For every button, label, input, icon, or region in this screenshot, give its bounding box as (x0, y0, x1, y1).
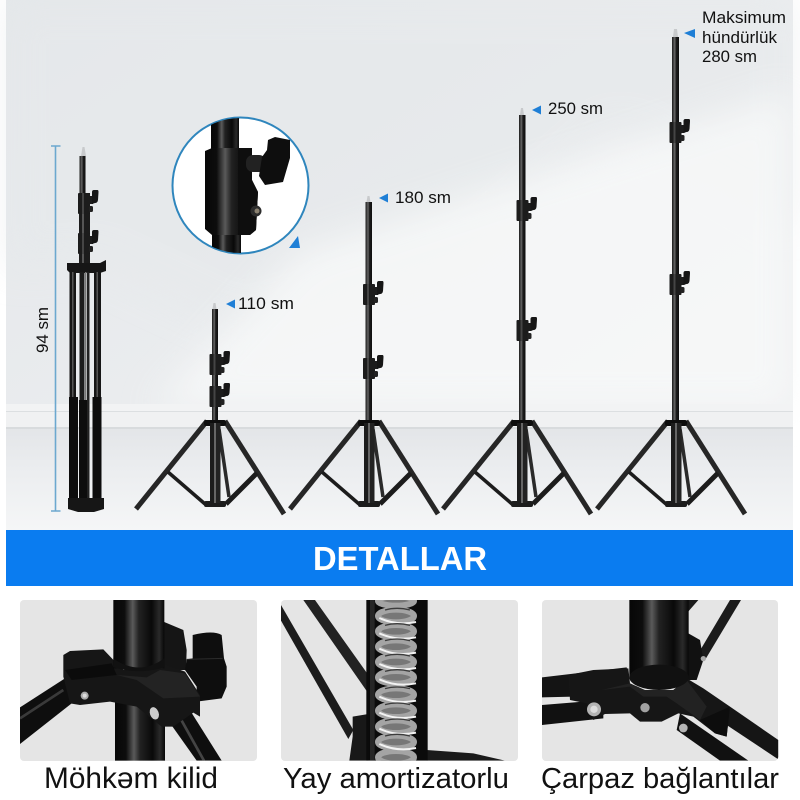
caption: Yay amortizatorlu: Yay amortizatorlu (283, 763, 509, 795)
caption: Möhkəm kilid: Möhkəm kilid (44, 762, 218, 795)
stand: 180 sm (290, 196, 438, 514)
panel: strong lock (20, 600, 257, 763)
label: maximum height 280 sm (684, 8, 786, 66)
panel: spring shock absorber (281, 596, 518, 764)
caption: Çarpaz bağlantılar: Çarpaz bağlantılar (541, 763, 779, 795)
dimension line: 94 sm: 94 sm (33, 307, 52, 353)
label: maximum height 280 sm: hündürlük (702, 28, 777, 47)
banner: DETALLAR (6, 530, 793, 586)
magnified clamp detail circle (172, 115, 308, 260)
label: 250 sm: 250 sm (548, 99, 603, 118)
stand: 250 sm (443, 108, 591, 514)
label: maximum height 280 sm: 280 sm (702, 47, 757, 66)
folded tripod stand (67, 147, 106, 512)
stand: 110 sm (136, 303, 284, 514)
label: maximum height 280 sm: Maksimum (702, 8, 786, 27)
panel: cross connections (542, 600, 778, 761)
label: 110 sm: 110 sm (238, 294, 294, 313)
photo background: wall and floor (6, 0, 793, 530)
dimension line: 94 sm (33, 146, 60, 511)
icon: blue triangle marker for detail circle (289, 236, 300, 248)
banner: DETALLAR: DETALLAR (313, 540, 487, 577)
label: 180 sm: 180 sm (395, 188, 451, 207)
stand: 280 sm maximum height (597, 29, 745, 514)
